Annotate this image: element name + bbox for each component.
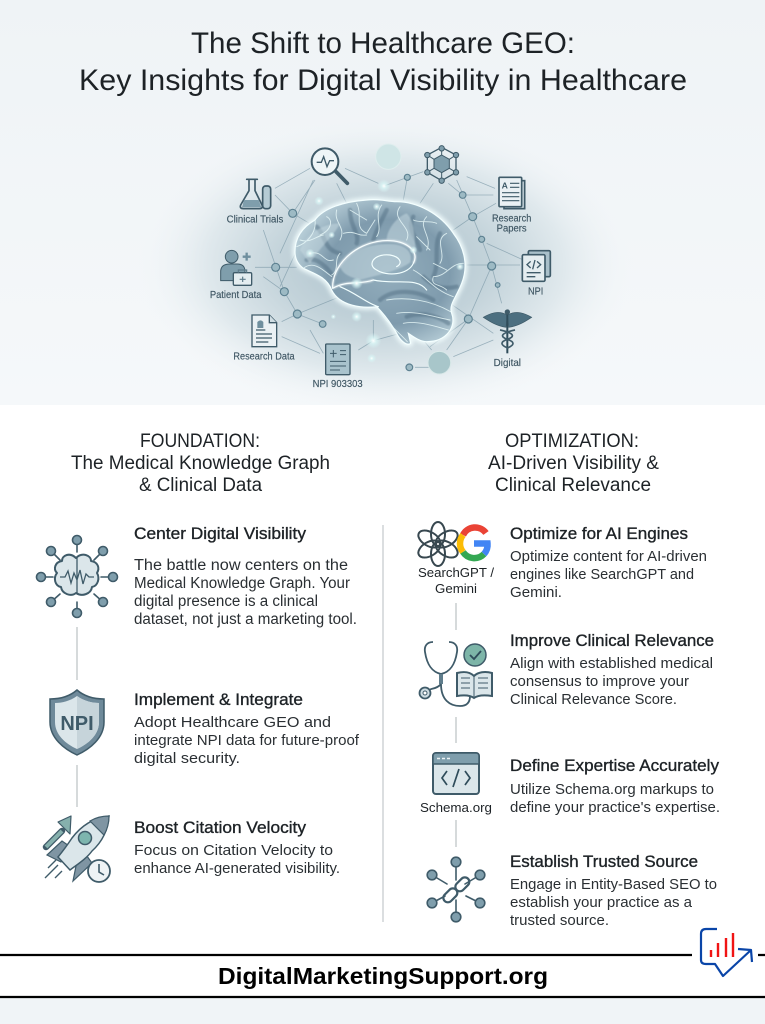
icon: Google G (460, 527, 488, 558)
temporal lobe outline (333, 241, 427, 307)
heading: foundation: The Medical Knowledge Graph (71, 453, 330, 474)
icon: stethoscope and book (420, 642, 492, 706)
text: implement and integrate: Adopt Healthcare GEO and (134, 714, 331, 731)
text: optimize for AI engines (510, 525, 707, 601)
text: establish trusted source: establish your practice as a (510, 894, 693, 911)
label: Research Data: Research Data (233, 352, 295, 363)
title: The Shift to Healthcare GEO: (191, 27, 575, 60)
label: SearchGPT / Gemini (418, 566, 495, 596)
text: optimize for AI engines: Optimize content for AI-driven (510, 548, 707, 565)
text: implement and integrate (134, 691, 360, 767)
icon: OpenAI style knot (415, 522, 461, 566)
brain (295, 200, 465, 344)
icon: logo chart arrow (701, 929, 752, 976)
text: implement and integrate: Implement & Integrate (134, 691, 303, 709)
heading: optimization: Clinical Relevance (495, 475, 651, 496)
icon: flask and test tube (240, 179, 271, 209)
hero backdrop (180, 145, 590, 390)
text: establish trusted source: Establish Trusted Source (510, 853, 698, 871)
label: Schema.org: Schema.org (420, 801, 492, 815)
text: boost citation velocity: Boost Citation Velocity (134, 819, 307, 837)
icon: code window (433, 753, 479, 794)
heading: foundation: & Clinical Data (139, 475, 262, 496)
label: NPI 903303: NPI 903303 (313, 379, 363, 390)
icon: magnifier (312, 148, 347, 183)
label: NPI: NPI (528, 286, 543, 297)
icon: caduceus (483, 309, 532, 353)
title: Key Insights for Digital Visibility in Healthcare (79, 64, 687, 97)
icon: NPI document (326, 344, 350, 375)
text: optimize for AI engines: Gemini. (510, 584, 562, 601)
text: define expertise accurately: Utilize Schema.org markups to (510, 781, 714, 798)
label: Digital: Digital (494, 358, 521, 369)
network nodes (272, 174, 500, 371)
glowing orbs (314, 144, 451, 374)
label: SearchGPT / Gemini: SearchGPT / (418, 566, 495, 580)
text: establish trusted source (510, 853, 717, 929)
text: improve clinical relevance: consensus to improve your (510, 673, 689, 690)
icon: molecule (425, 146, 459, 183)
text: improve clinical relevance: Improve Clinical Relevance (510, 632, 714, 650)
text: improve clinical relevance: Align with established medical (510, 655, 713, 672)
label: Research Papers (492, 213, 531, 235)
text: optimize for AI engines: Optimize for AI Engines (510, 525, 688, 543)
heading: optimization (488, 431, 659, 496)
text: center digital visibility: dataset, not just a marketing tool. (134, 611, 357, 628)
icon: brain with nodes (36, 536, 118, 618)
label: SearchGPT / Gemini: Gemini (435, 582, 477, 596)
icon: research papers: A (502, 180, 509, 190)
icon: rocket (45, 816, 110, 882)
brain veins (297, 203, 463, 342)
footer website text: DigitalMarketingSupport.org (218, 963, 548, 989)
brain dark folds (307, 210, 457, 323)
icon: research papers (499, 177, 525, 209)
heading: foundation: FOUNDATION: (140, 431, 260, 452)
connection lines (255, 168, 523, 367)
icon: linked nodes (427, 857, 485, 922)
text: establish trusted source: trusted source. (510, 912, 609, 929)
text: boost citation velocity: Focus on Citation Velocity to (134, 842, 333, 859)
text: center digital visibility (134, 525, 357, 628)
text: center digital visibility: digital presence is a clinical (134, 593, 318, 610)
label: Research Papers: Research (492, 213, 531, 224)
text: center digital visibility: Medical Knowledge Graph. Your (134, 575, 350, 592)
icon: patient (221, 250, 252, 285)
text: center digital visibility: The battle now centers on the (134, 557, 348, 574)
brain light lobes (300, 213, 417, 280)
connector (76, 627, 78, 680)
text: establish trusted source: Engage in Entity-Based SEO to (510, 876, 717, 893)
icon: NPI shield: NPI (60, 713, 94, 735)
label: Clinical Trials: Clinical Trials (227, 214, 283, 225)
connector (76, 765, 78, 807)
text: center digital visibility: Center Digital Visibility (134, 525, 307, 543)
text: improve clinical relevance: Clinical Relevance Score. (510, 691, 677, 708)
connector (455, 717, 457, 743)
text: improve clinical relevance (510, 632, 714, 708)
icon: code document (522, 251, 550, 281)
label: Research Papers: Papers (497, 224, 527, 235)
text: implement and integrate: integrate NPI data for future-proof (134, 732, 360, 749)
heading: optimization: OPTIMIZATION: (505, 431, 639, 452)
text: define expertise accurately: Define Expertise Accurately (510, 757, 720, 775)
text: define expertise accurately: define your practice's expertise. (510, 799, 720, 816)
text: define expertise accurately (510, 757, 720, 816)
title (79, 27, 687, 97)
panel: foundation (36, 431, 360, 882)
text: boost citation velocity (134, 819, 340, 877)
text: implement and integrate: digital security. (134, 750, 240, 767)
icon: NPI shield (50, 690, 104, 755)
panel: optimization (415, 431, 720, 929)
label: Patient Data: Patient Data (210, 290, 262, 301)
hero illustration: glowing brain network (180, 144, 590, 390)
heading: optimization: AI-Driven Visibility & (488, 453, 659, 474)
center divider (382, 525, 384, 922)
text: optimize for AI engines: engines like SearchGPT and (510, 566, 694, 583)
footer (0, 929, 765, 997)
text: boost citation velocity: enhance AI-generated visibility. (134, 860, 340, 877)
heading: foundation (71, 431, 330, 496)
connector (455, 603, 457, 630)
icon network (210, 144, 550, 390)
connector (455, 820, 457, 847)
icon: research data document (252, 315, 277, 347)
